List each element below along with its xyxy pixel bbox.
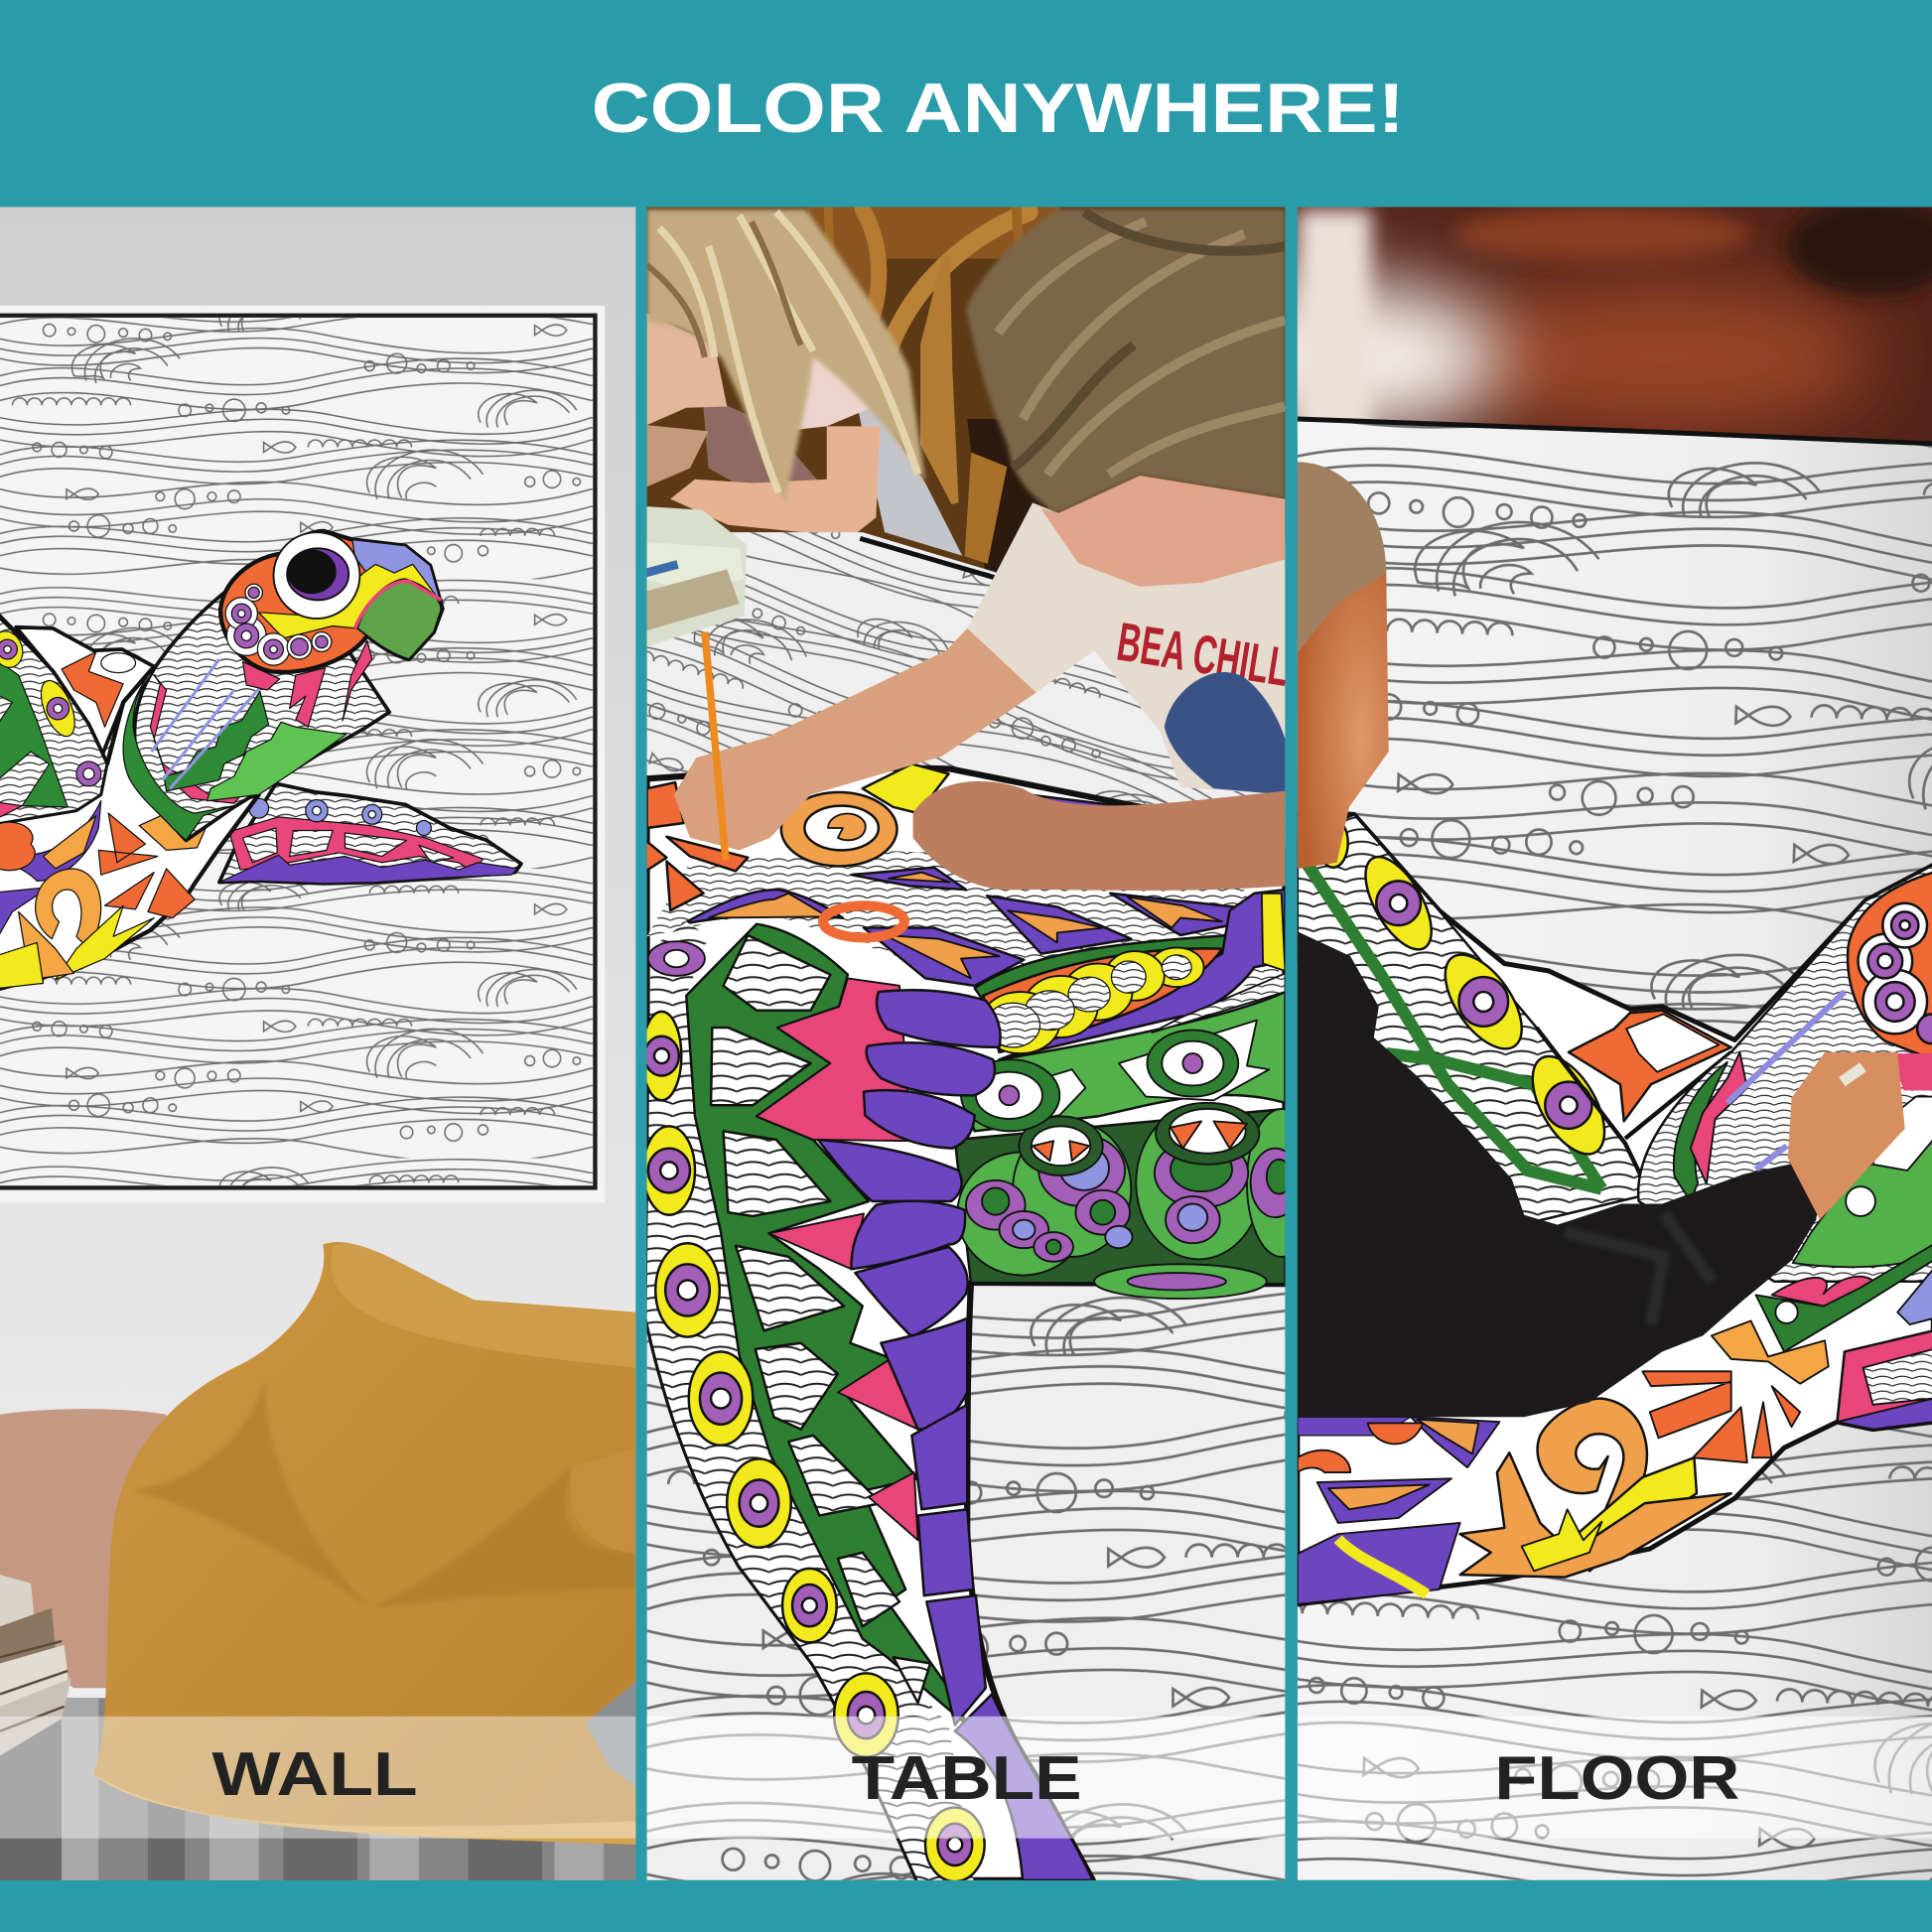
pink band <box>1772 1277 1876 1307</box>
shirt <box>967 502 1285 794</box>
pink scallops <box>1691 1052 1747 1184</box>
orange rear flipper <box>1569 1011 1731 1121</box>
swirl <box>1538 1399 1647 1550</box>
neck <box>122 591 391 842</box>
top purple wedge <box>1029 794 1189 838</box>
periwinkle stripes <box>1727 992 1910 1170</box>
orange leaves <box>709 873 1222 978</box>
shell eyes <box>961 1021 1269 1131</box>
swirl and flower <box>0 869 154 990</box>
silver bag corner <box>586 1682 635 1787</box>
head <box>220 531 443 672</box>
paper waves below turtle <box>647 1282 1285 1880</box>
wall background <box>0 207 635 1734</box>
marker <box>1842 1067 1863 1082</box>
wood panelling <box>807 207 1060 302</box>
table edge line <box>860 538 996 578</box>
head <box>1298 542 1389 869</box>
table paper surface <box>647 532 1285 1880</box>
blonde hair <box>647 209 925 502</box>
dark corner under chair <box>967 419 1047 579</box>
panel: wall <box>0 207 635 1885</box>
label: floor: FLOOR <box>1494 1744 1739 1813</box>
stack of books <box>0 1575 71 1756</box>
head on floor <box>1848 873 1932 1059</box>
dark green ring bottom <box>1756 1244 1932 1351</box>
zigzag squares <box>1872 1097 1932 1171</box>
hand <box>1788 1052 1905 1220</box>
body outline <box>647 768 1285 1880</box>
petal rings <box>966 1103 1300 1299</box>
orange swirl <box>781 763 949 866</box>
yellow eye ovals <box>1318 818 1619 1166</box>
neck greens <box>1793 1097 1932 1267</box>
shell bottom leaves <box>0 800 101 935</box>
purple bottom left <box>1298 1523 1460 1604</box>
left arm <box>674 628 1036 850</box>
hatched cells <box>711 935 930 1703</box>
body <box>0 604 259 992</box>
wooden chairs <box>828 207 1029 561</box>
purple leaves <box>1411 1417 1499 1467</box>
periwinkle flipper dot <box>1897 1269 1932 1324</box>
shell edge hatching <box>647 921 973 1880</box>
girl at the table <box>647 209 962 556</box>
purple leaves <box>683 868 1235 986</box>
right hand and arm <box>913 781 1285 891</box>
orange rays <box>98 813 195 918</box>
sleeve fold highlights <box>1565 1213 1713 1324</box>
red rings <box>823 905 904 937</box>
pink scales <box>757 978 918 1540</box>
green ring <box>1674 1062 1727 1201</box>
turtle on floor <box>1298 813 1932 1604</box>
panel: table <box>642 207 1315 1881</box>
panel: floor <box>1182 198 1932 1880</box>
paper waves on table top <box>647 532 1285 847</box>
body outline <box>1298 813 1932 1604</box>
label band <box>0 1717 1932 1839</box>
paper edge <box>1298 419 1932 444</box>
face <box>647 313 727 425</box>
shirt print: BEA CHILL <box>1113 612 1293 698</box>
label: table: TABLE <box>852 1744 1082 1813</box>
red lens with yellow rings <box>975 890 1285 1059</box>
poster frame <box>0 306 605 1202</box>
green network <box>1307 863 1601 1189</box>
label: wall: WALL <box>211 1740 418 1809</box>
floor <box>0 1698 635 1885</box>
green petals <box>957 1106 1315 1276</box>
yellow ribbon <box>1338 1539 1427 1594</box>
shirt whale <box>1165 672 1285 794</box>
dining room background <box>647 207 1285 725</box>
orange ornament <box>1712 1320 1829 1384</box>
face <box>1041 476 1285 587</box>
hair <box>1298 462 1386 653</box>
shell hatching <box>1298 814 1650 1232</box>
beanbag <box>93 1242 635 1845</box>
pink under head <box>1891 1053 1932 1090</box>
green network <box>686 924 967 1725</box>
pink sleeve <box>796 355 871 429</box>
rear flipper white <box>1626 1014 1719 1072</box>
person in black sweater <box>1298 462 1905 1417</box>
wood floor <box>1182 198 1932 454</box>
purple ring <box>648 941 705 976</box>
purple scales <box>818 990 1093 1880</box>
orange pencil <box>705 632 726 860</box>
paper wave pattern <box>1298 419 1932 1880</box>
crayon box <box>645 506 747 647</box>
white band above green <box>1152 973 1285 1033</box>
front flipper <box>1837 1330 1932 1430</box>
orange rays <box>1642 1371 1800 1462</box>
hair <box>966 209 1285 514</box>
neck <box>1638 865 1932 1282</box>
red rings <box>1298 1423 1423 1472</box>
light green upper shell <box>967 992 1285 1131</box>
orange wedges <box>645 782 748 910</box>
title: COLOR ANYWHERE! <box>592 69 1405 147</box>
boy <box>674 209 1293 891</box>
rear flipper <box>16 627 154 763</box>
striped top <box>703 405 817 483</box>
shell dividing line <box>1537 1028 1731 1194</box>
lower dark green shell <box>955 1109 1285 1284</box>
turtle on poster <box>0 531 521 992</box>
sleeve <box>1298 931 1820 1417</box>
pink pouf <box>0 1409 167 1688</box>
dress <box>859 407 963 556</box>
front flipper <box>219 783 521 884</box>
yellow eye ovals <box>642 1012 985 1881</box>
shell <box>0 607 107 826</box>
upper body hatching <box>647 850 1285 986</box>
arm <box>670 426 880 537</box>
turtle on table <box>642 763 1315 1881</box>
paper sheet <box>1298 419 1932 1880</box>
yellow petals <box>1578 1457 1697 1571</box>
orange flower <box>1460 1452 1731 1578</box>
